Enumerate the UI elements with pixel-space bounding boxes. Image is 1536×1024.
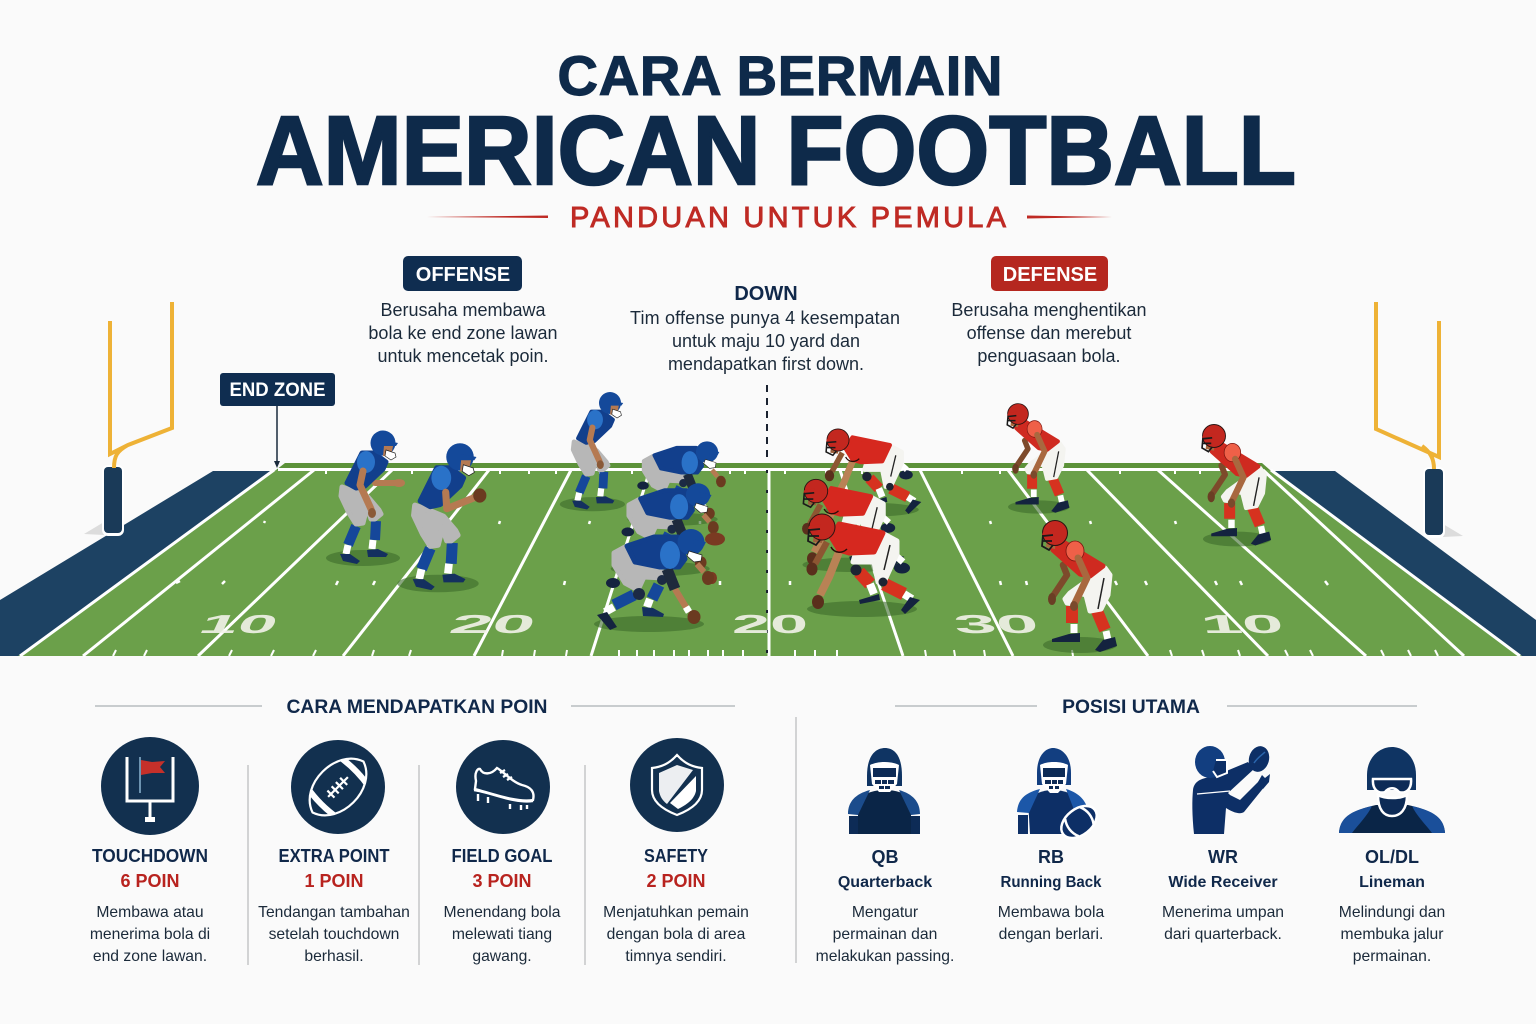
callout: offense: OFFENSE (416, 264, 510, 286)
position: WR: dari quarterback. (1164, 926, 1282, 943)
callout: defense (951, 256, 1147, 366)
end zone label (220, 373, 335, 468)
icon: field goal (456, 740, 550, 834)
scoring: extra point (258, 846, 410, 965)
player: red lineman 3 (806, 514, 920, 617)
position: QB (816, 847, 954, 965)
yard numbers: 30 (951, 609, 1041, 639)
callout: down (630, 283, 900, 374)
callout: down: untuk maju 10 yard dan (672, 331, 860, 351)
scoring: safety (603, 846, 749, 965)
icon: RB (1017, 748, 1103, 845)
scoring: touchdown: menerima bola di (90, 926, 210, 943)
position: WR: Menerima umpan (1162, 904, 1284, 921)
field (0, 385, 1536, 656)
icon: WR (1192, 744, 1272, 834)
position: OL/DL: permainan. (1353, 948, 1431, 965)
subtitle (427, 202, 1112, 234)
position: WR: Wide Receiver (1168, 874, 1278, 891)
yard numbers (194, 609, 1286, 639)
left goal post (84, 302, 172, 536)
position: QB: Mengatur (852, 904, 918, 921)
scoring: extra point: EXTRA POINT (278, 846, 390, 866)
callout: down: DOWN (734, 283, 798, 305)
position: OL/DL: OL/DL (1365, 847, 1419, 867)
yard numbers: 20 (445, 610, 540, 639)
heading: cara mendapatkan poin: CARA MENDAPATKAN POIN (286, 697, 548, 718)
scoring: touchdown: TOUCHDOWN (92, 846, 208, 866)
position: OL/DL: Melindungi dan (1339, 904, 1445, 921)
icon: safety (630, 738, 724, 832)
subtitle: PANDUAN UNTUK PEMULA (570, 202, 1007, 234)
title (256, 44, 1296, 205)
scoring: touchdown (90, 846, 210, 965)
callout: down: Tim offense punya 4 kesempatan (630, 308, 900, 328)
player: blue back 1 (326, 430, 405, 566)
player: red lineman 2 (802, 479, 904, 572)
position: OL/DL (1339, 847, 1445, 965)
position: RB: RB (1038, 847, 1064, 867)
callout: defense: penguasaan bola. (977, 346, 1121, 366)
callout: offense (368, 256, 558, 366)
yard numbers: 10 (194, 609, 284, 639)
scoring: extra point: setelah touchdown (269, 926, 399, 943)
player: red defender 5 (1202, 424, 1271, 546)
player: blue back 2 (397, 443, 486, 592)
player: red defender 6 (1042, 520, 1117, 653)
position: QB: permainan dan (833, 926, 937, 943)
title: AMERICAN FOOTBALL (256, 96, 1296, 205)
scoring: touchdown: end zone lawan. (93, 948, 207, 965)
scoring: touchdown: Membawa atau (96, 904, 204, 921)
yard numbers: 20 (732, 609, 808, 639)
position: QB: Quarterback (838, 874, 932, 891)
right goal post (1376, 302, 1463, 538)
scoring: safety: dengan bola di area (607, 926, 746, 943)
icon: touchdown (101, 737, 199, 835)
callout: offense: Berusaha membawa (380, 300, 547, 320)
icon: OL/DL (1339, 747, 1445, 833)
position: OL/DL: membuka jalur (1341, 926, 1443, 943)
end zone label: END ZONE (230, 380, 326, 401)
scoring: field goal: FIELD GOAL (452, 846, 552, 866)
callout: defense: DEFENSE (1003, 264, 1097, 286)
scoring: safety: Menjatuhkan pemain (603, 904, 749, 921)
icon: QB (848, 748, 920, 834)
callout: defense: Berusaha menghentikan (951, 300, 1147, 320)
player: blue lineman 1 (627, 441, 726, 526)
player: red lineman 1 (825, 429, 921, 516)
scoring: touchdown: 6 POIN (120, 871, 180, 891)
scoring: field goal: Menendang bola (444, 904, 561, 921)
scoring: extra point: Tendangan tambahan (258, 904, 410, 921)
position: RB: Membawa bola (998, 904, 1104, 921)
scoring: field goal: gawang. (472, 948, 532, 965)
scoring: field goal: melewati tiang (452, 926, 552, 943)
position: OL/DL: Lineman (1359, 874, 1425, 891)
scoring: extra point: 1 POIN (304, 871, 364, 891)
position: RB: dengan berlari. (999, 926, 1103, 943)
callout: defense: offense dan merebut (967, 323, 1131, 343)
callout: offense: bola ke end zone lawan (368, 323, 558, 343)
scoring: field goal: 3 POIN (472, 871, 532, 891)
callout: down: mendapatkan first down. (668, 354, 864, 374)
heading: posisi utama: POSISI UTAMA (1062, 697, 1200, 718)
position: RB: Running Back (1000, 874, 1102, 891)
football (705, 532, 725, 584)
position: QB: melakukan passing. (816, 948, 954, 965)
player: blue lineman 2 (611, 483, 719, 576)
position: RB (998, 847, 1104, 943)
player: blue back 3 (560, 392, 625, 511)
scoring: safety: 2 POIN (646, 871, 706, 891)
scoring: safety: SAFETY (644, 846, 708, 866)
callout: offense: untuk mencetak poin. (377, 346, 549, 366)
title: CARA BERMAIN (558, 44, 1002, 107)
position: QB: QB (872, 847, 899, 867)
position: WR (1162, 847, 1284, 943)
scoring: safety: timnya sendiri. (625, 948, 727, 965)
icon: extra point (291, 740, 385, 834)
scoring: extra point: berhasil. (304, 948, 364, 965)
player: blue lineman 3 (594, 529, 714, 632)
player: red defender 4 (1007, 404, 1069, 514)
position: WR: WR (1208, 847, 1238, 867)
yard numbers: 10 (1198, 609, 1286, 639)
scoring: field goal (444, 846, 561, 965)
